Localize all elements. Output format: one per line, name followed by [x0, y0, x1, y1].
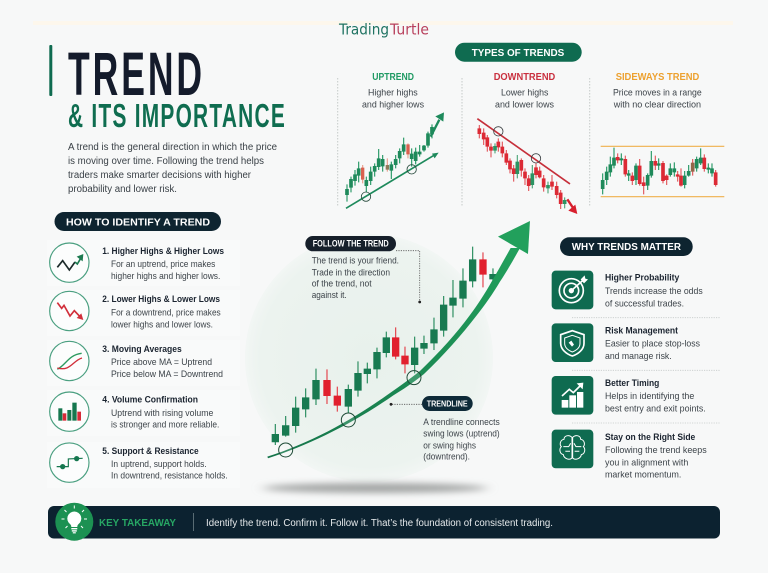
- item 4: volume confirmation: [50, 392, 219, 431]
- item: risk management: and manage risk.: [605, 350, 672, 361]
- panel: how to identify a trend: [47, 212, 240, 488]
- chart: downtrend: [477, 119, 577, 214]
- title: [49, 40, 286, 134]
- item 5: support and resistance: 5. Support & Resistance: [102, 445, 199, 456]
- uptrend column: and higher lows: [362, 98, 424, 109]
- item: stay on the right side: Stay on the Right Side: [605, 431, 695, 442]
- item 4: volume confirmation: 4. Volume Confirmation: [102, 394, 198, 405]
- item 3: moving averages: [50, 341, 223, 381]
- ground shadow: [263, 483, 487, 493]
- item 3: moving averages: 3. Moving Averages: [102, 343, 182, 354]
- item: higher probability: [552, 271, 703, 309]
- callout: follow the trend: [305, 236, 421, 303]
- item 3: moving averages: Price below MA = Downtrend: [111, 368, 223, 379]
- icon: brain: [552, 430, 593, 468]
- item 4: volume confirmation: Uptrend with rising volume: [111, 407, 213, 418]
- icon: rising bars: [552, 376, 593, 415]
- panel: main trend chart: [245, 221, 530, 493]
- title: & ITS IMPORTANCE: [68, 97, 286, 134]
- icon: shield: [552, 323, 593, 362]
- item: higher probability: of successful trades.: [605, 297, 684, 308]
- uptrend column: [346, 72, 444, 208]
- callout: trendline: (downtrend).: [423, 451, 470, 462]
- uptrend column: Higher highs: [368, 87, 418, 98]
- item 1: higher highs: For an uptrend, price makes: [111, 258, 216, 269]
- item: stay on the right side: Following the trend keeps: [605, 444, 707, 455]
- logo: [338, 20, 429, 38]
- item: stay on the right side: [552, 430, 707, 479]
- takeaway text: Identify the trend. Confirm it. Follow it. That’s the foundation of consistent trading.: [206, 518, 553, 529]
- item 1: higher highs: higher highs and higher lows.: [111, 270, 220, 281]
- callout: follow the trend: FOLLOW THE TREND: [313, 239, 389, 249]
- sideways column: Price moves in a range: [613, 87, 702, 98]
- item 1: higher highs: 1. Higher Highs & Higher Lows: [102, 245, 224, 256]
- background circle: [245, 234, 493, 482]
- chart: main candlesticks and trendline: [267, 221, 530, 458]
- item 5: support and resistance: In downtrend, resistance holds.: [111, 470, 228, 481]
- heading: why trends matter: WHY TRENDS MATTER: [572, 242, 682, 253]
- sideways column: with no clear direction: [613, 98, 701, 109]
- callout: follow the trend: of the trend, not: [312, 278, 372, 289]
- item: better timing: Better Timing: [605, 377, 660, 388]
- intro text: [68, 142, 278, 195]
- item 2: lower highs: 2. Lower Highs & Lower Lows: [102, 293, 220, 304]
- item: better timing: Helps in identifying the: [605, 390, 694, 401]
- callout: trendline: or swing highs: [423, 439, 476, 450]
- callout: trendline: TRENDLINE: [427, 399, 468, 409]
- icon: target: [552, 271, 593, 309]
- icon: volume bars: [50, 392, 89, 431]
- item: risk management: [552, 323, 700, 362]
- downtrend column: [477, 72, 577, 214]
- callout: trendline: swing lows (uptrend): [423, 428, 500, 439]
- icon: zigzag down arrow: [50, 291, 89, 331]
- logo: Turtle: [389, 20, 429, 38]
- callout: trendline: A trendline connects: [423, 416, 500, 427]
- callout: follow the trend: Trade in the direction: [312, 266, 390, 277]
- item: risk management: Risk Management: [605, 324, 678, 335]
- downtrend column: DOWNTREND: [494, 72, 555, 83]
- callout: follow the trend: against it.: [312, 289, 347, 300]
- logo: Trading: [338, 20, 389, 38]
- chart: sideways: [601, 146, 724, 197]
- icon: support and resistance steps: [50, 443, 89, 482]
- item: higher probability: Trends increase the odds: [605, 285, 703, 296]
- chart: uptrend: [346, 112, 444, 208]
- intro text: A trend is the general direction in which the price: [68, 142, 278, 153]
- panel: types of trends: [338, 43, 724, 214]
- item 2: lower highs: lower highs and lower lows.: [111, 318, 213, 329]
- item: higher probability: Higher Probability: [605, 272, 680, 283]
- heading: why trends matter: [560, 237, 693, 256]
- icon: zigzag up arrow: [50, 243, 89, 282]
- sideways column: SIDEWAYS TREND: [616, 72, 699, 83]
- item 3: moving averages: Price above MA = Uptrend: [111, 356, 212, 367]
- heading: how to identify: HOW TO IDENTIFY A TREND: [66, 218, 210, 228]
- item 1: higher highs: [50, 243, 224, 282]
- uptrend column: UPTREND: [372, 72, 414, 83]
- item 2: lower highs: For a downtrend, price makes: [111, 307, 221, 318]
- intro text: probability and lower risk.: [68, 184, 177, 195]
- item 5: support and resistance: In uptrend, support holds.: [111, 458, 207, 469]
- heading: types of trends: [455, 43, 582, 62]
- icon: light bulb: [55, 503, 93, 541]
- panel: why trends matter: [552, 237, 720, 479]
- item: risk management: Easier to place stop-loss: [605, 338, 700, 349]
- icon: moving average curves: [50, 341, 89, 381]
- callout: follow the trend: The trend is your friend.: [312, 255, 399, 266]
- callout: trendline: [390, 396, 500, 462]
- item 5: support and resistance: [50, 443, 228, 482]
- item: better timing: best entry and exit points.: [605, 402, 706, 413]
- intro text: is moving over time. Following the trend helps: [68, 156, 264, 167]
- label: key takeaway: KEY TAKEAWAY: [99, 517, 176, 529]
- heading: how to identify: [54, 212, 221, 231]
- panel: key takeaway: [48, 503, 720, 541]
- item 4: volume confirmation: is stronger and more reliable.: [111, 419, 219, 430]
- item: better timing: [552, 376, 706, 415]
- item: stay on the right side: you in alignment with: [605, 456, 688, 467]
- sideways column: [601, 72, 724, 197]
- intro text: traders make smarter decisions with higher: [68, 170, 252, 181]
- item: stay on the right side: market momentum.: [605, 468, 681, 479]
- title: TREND: [68, 40, 205, 108]
- downtrend column: and lower lows: [495, 98, 554, 109]
- heading: types of trends: TYPES OF TRENDS: [472, 48, 565, 59]
- downtrend column: Lower highs: [501, 87, 549, 98]
- item 2: lower highs: [50, 291, 221, 331]
